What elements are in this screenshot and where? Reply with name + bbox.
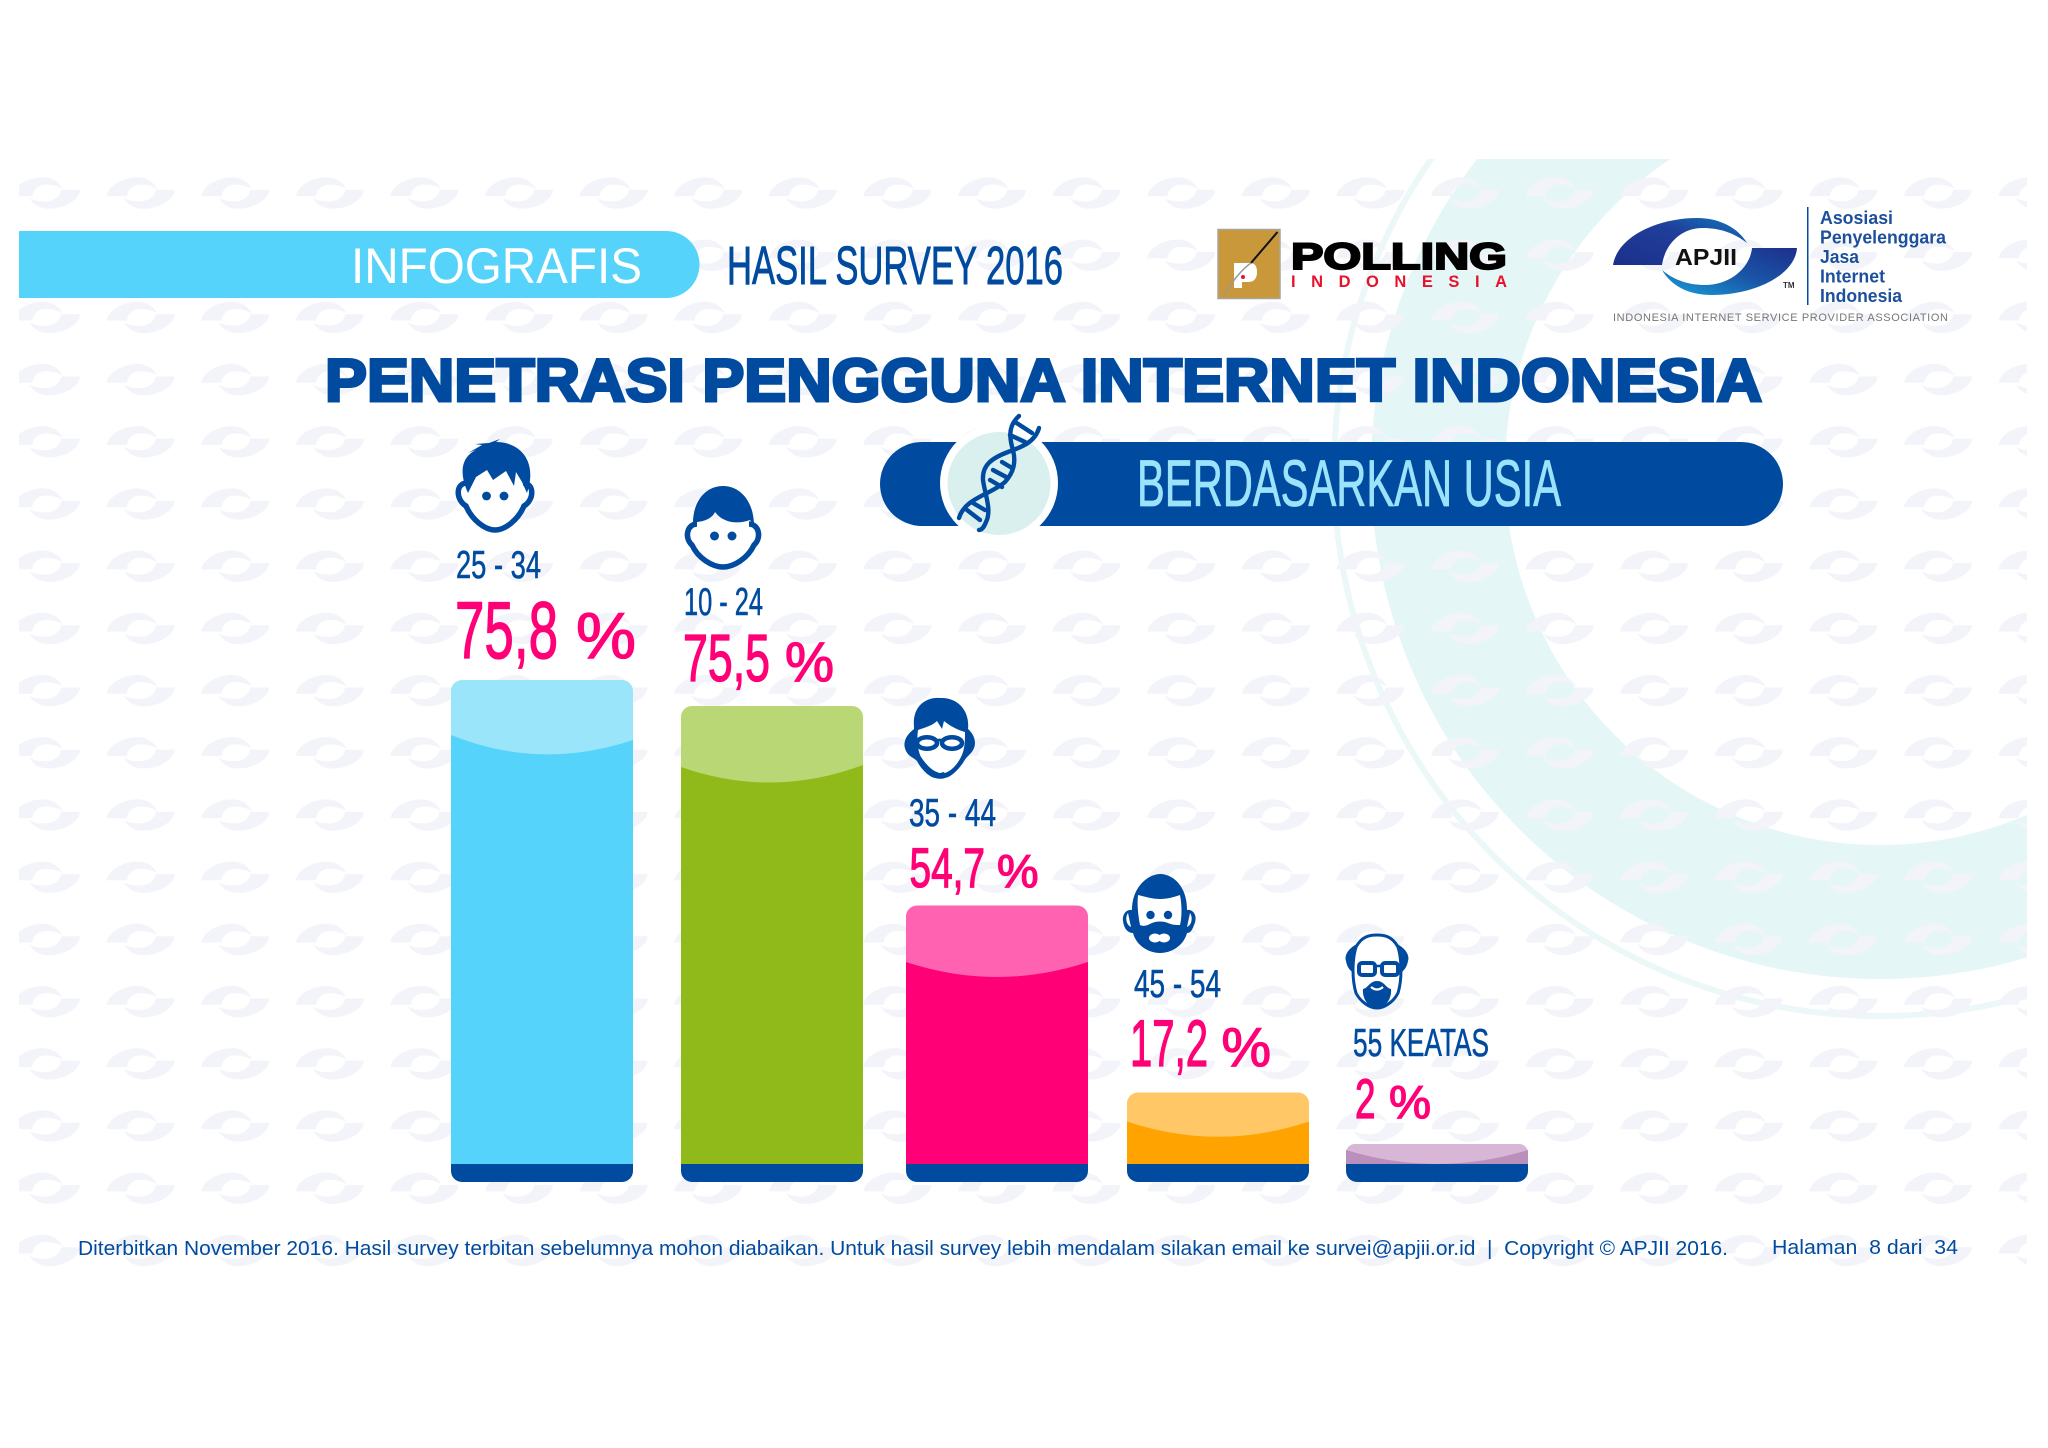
icon: man with glasses 35-44 [904, 698, 975, 779]
value: 2 %: 2 [1355, 1067, 1376, 1130]
value: 17,2 %: 17,2 [1130, 1006, 1208, 1080]
icon: bearded man 45-54 [1123, 874, 1196, 953]
logo: apjii: Asosiasi [1820, 208, 1893, 228]
icon: boy face 25-34 [458, 439, 532, 530]
background: teal rings and logo pattern [19, 159, 2027, 1266]
icon: dna [940, 416, 1058, 542]
label: 45-54: 45 - 54 [1134, 963, 1221, 1006]
label: 35-44: 35 - 44 [909, 792, 996, 835]
value: 17,2 %: % [1222, 1016, 1271, 1078]
logo: apjii: Internet [1820, 266, 1885, 286]
logo: apjii [1613, 207, 1948, 324]
logo: polling indonesia: INDONESIA [1291, 273, 1507, 291]
logo: apjii: INDONESIA INTERNET SERVICE PROVIDER ASSOCIATION [1613, 312, 1948, 324]
header pill: infografis [19, 231, 700, 298]
label: 55 keatas: 55 KEATAS [1353, 1022, 1489, 1065]
value: 54,7 %: 54,7 [910, 836, 985, 899]
value: 75,8 %: 75,8 [455, 586, 558, 676]
icon: older man 55+ [1346, 935, 1408, 1008]
bar: 35-44 [906, 906, 1088, 1182]
logo: apjii: TM [1783, 281, 1795, 290]
bar: 45-54 [1127, 1092, 1309, 1182]
logo: polling indonesia [1218, 230, 1507, 298]
icon: child face 10-24 [687, 486, 759, 567]
value: 75,5 %: 75,5 [683, 621, 770, 696]
banner: berdasarkan usia [880, 442, 1783, 526]
value: 54,7 %: % [997, 845, 1038, 897]
logo: apjii: Indonesia [1820, 286, 1903, 306]
logo: apjii: Jasa [1820, 247, 1860, 267]
value: 2 %: % [1389, 1076, 1431, 1128]
bar: 55 keatas [1346, 1144, 1528, 1182]
label: 10-24: 10 - 24 [684, 581, 763, 624]
bar: 10-24 [681, 706, 863, 1182]
heading: hasil survey 2016: HASIL SURVEY 2016 [727, 236, 1063, 296]
logo: polling indonesia: POLLING [1291, 236, 1507, 277]
logo: apjii: Penyelenggara [1820, 228, 1947, 248]
value: 75,8 %: % [576, 599, 636, 672]
value: 2 % [1355, 1067, 1431, 1130]
value: 75,5 %: % [785, 630, 834, 693]
title: PENETRASI PENGGUNA INTERNET INDONESIA [325, 347, 1762, 414]
banner: berdasarkan usia: BERDASARKAN USIA [1137, 446, 1561, 520]
header pill: infografis: INFOGRAFIS [351, 238, 642, 294]
page number: Halaman 8 dari 34 [1772, 1236, 1958, 1259]
label: 25-34: 25 - 34 [456, 544, 541, 587]
logo: apjii: APJII [1675, 244, 1737, 270]
footer note: Diterbitkan November 2016. Hasil survey terbitan sebelumnya mohon diabaikan. Untuk hasil survey lebih mendalam silakan email ke survei@apjii.or.id | Copyright © APJII 2016. [78, 1237, 1728, 1260]
bar: 25-34 [451, 680, 633, 1182]
